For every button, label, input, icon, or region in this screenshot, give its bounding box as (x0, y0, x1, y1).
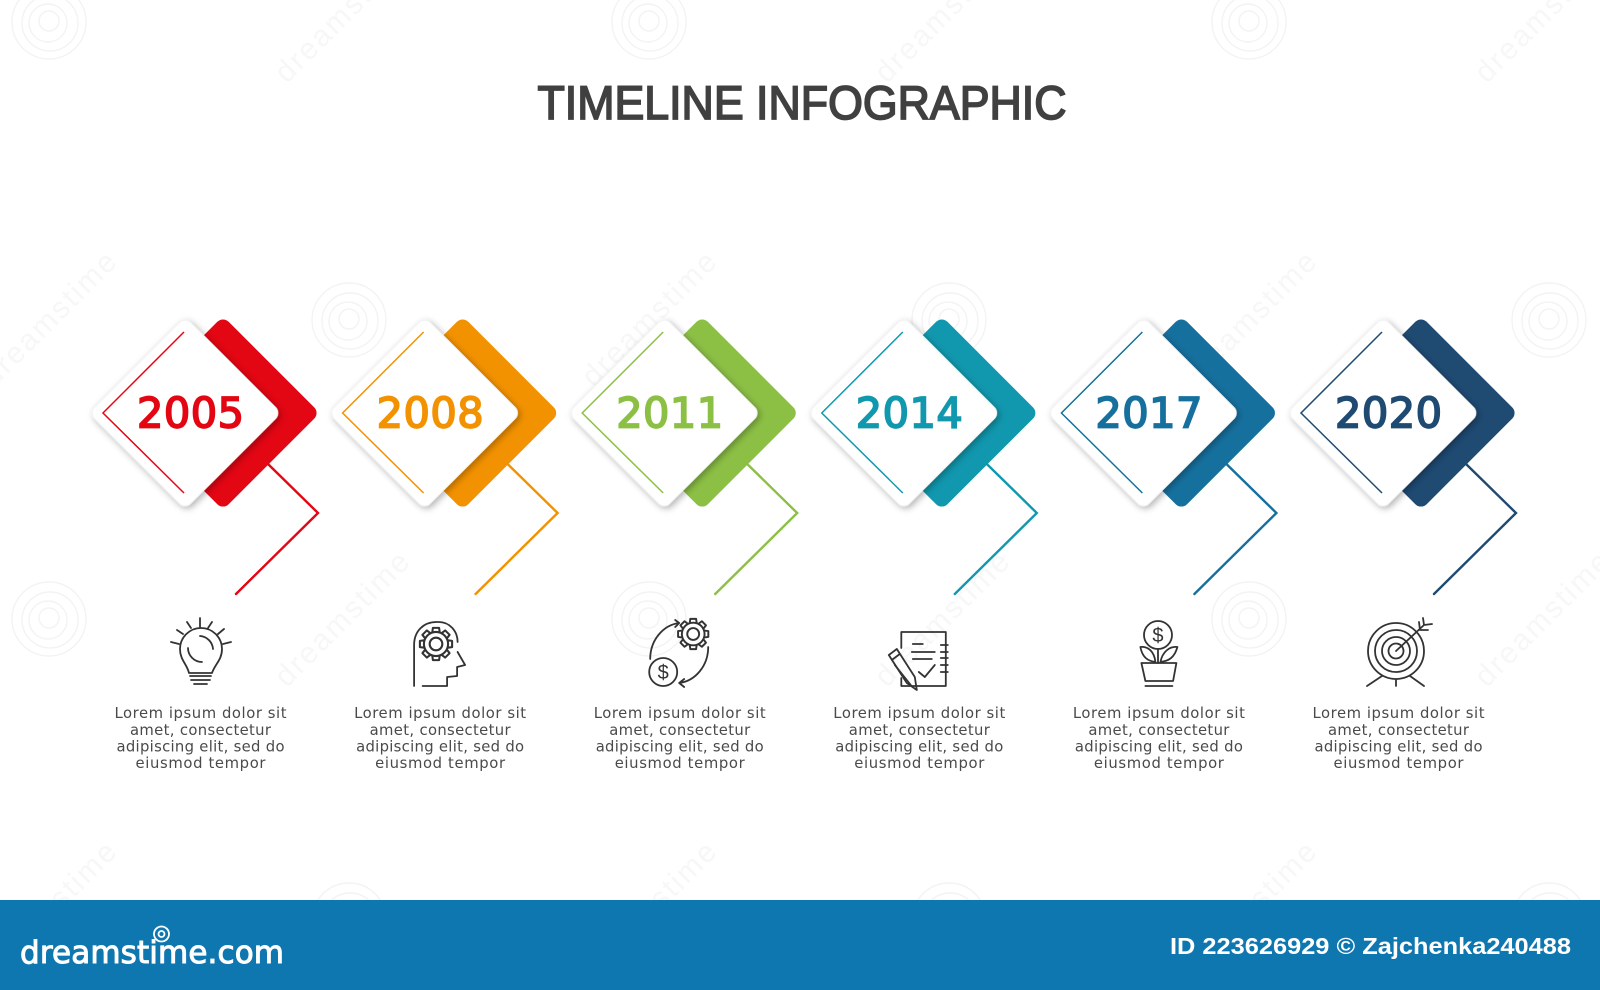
year: 2017: 2017 (1095, 388, 1202, 438)
connector line: 2020 (1434, 464, 1516, 594)
year: 2020: 2020 (1335, 388, 1442, 438)
icon: document and pen (889, 632, 948, 690)
description: 2017 (1073, 705, 1245, 772)
description: 2014 (833, 705, 1005, 772)
back chevron: 2017 (1085, 316, 1278, 510)
watermark pattern: dreamstime (1175, 835, 1323, 983)
description: 2020: amet, consectetur (1328, 722, 1470, 739)
description: 2011: Lorem ipsum dolor sit (594, 705, 766, 722)
step 2020 (1287, 316, 1518, 772)
image id and credit: ID 223626929 © Zajchenka240488 (1170, 933, 1571, 959)
white diamond: 2008 (328, 317, 521, 509)
diamond outline: 2011 (582, 332, 663, 493)
description: 2008: adipiscing elit, sed do (356, 738, 524, 756)
description: 2020: Lorem ipsum dolor sit (1312, 705, 1485, 722)
step 2008 (328, 316, 559, 772)
description: 2020: eiusmod tempor (1334, 755, 1464, 772)
step 2005 (89, 316, 320, 772)
icon: head with gear (414, 622, 465, 686)
white diamond: 2020 (1287, 317, 1479, 509)
back chevron: 2014 (845, 316, 1039, 510)
year: 2005: 2005 (137, 388, 244, 438)
description: 2014: adipiscing elit, sed do (835, 738, 1003, 756)
year: 2011: 2011 (616, 388, 723, 438)
step 2011 (568, 316, 799, 772)
description: 2008: eiusmod tempor (375, 755, 506, 772)
description: 2011: amet, consectetur (609, 722, 751, 739)
dollar sign: cycle icon: $ (658, 662, 669, 684)
watermark pattern: dreamstime (575, 245, 723, 393)
description: 2005: Lorem ipsum dolor sit (114, 705, 287, 722)
step 2014 (808, 316, 1039, 772)
year: 2008: 2008 (377, 388, 484, 438)
step 2017 (1047, 316, 1278, 772)
icon: light bulb (171, 618, 231, 684)
description: 2005: amet, consectetur (130, 722, 272, 739)
footer banner (0, 900, 1600, 990)
description: 2017: eiusmod tempor (1094, 755, 1225, 772)
description: 2008: Lorem ipsum dolor sit (354, 705, 526, 722)
description: 2011 (594, 705, 766, 772)
icon: money and gear cycle (649, 619, 708, 687)
white diamond: 2005 (89, 317, 281, 509)
diamond outline: 2020 (1301, 332, 1382, 493)
description: 2017: adipiscing elit, sed do (1075, 738, 1243, 756)
brand spiral icon (154, 926, 169, 942)
brand logo text: dreamstime.com (20, 935, 284, 971)
back chevron: 2005 (126, 316, 320, 510)
icon: money plant (1140, 621, 1177, 686)
title: TIMELINE INFOGRAPHIC (538, 76, 1066, 129)
diamond outline: 2017 (1061, 332, 1142, 493)
connector line: 2014 (955, 464, 1037, 594)
description: 2005: adipiscing elit, sed do (116, 738, 284, 756)
description: 2005: eiusmod tempor (136, 755, 266, 772)
watermark pattern: dreamstime (268, 545, 416, 693)
description: 2020: adipiscing elit, sed do (1314, 738, 1482, 756)
description: 2014: Lorem ipsum dolor sit (833, 705, 1005, 722)
description: 2017: amet, consectetur (1088, 722, 1230, 739)
description: 2011: eiusmod tempor (615, 755, 746, 772)
watermark pattern: dreamstime (1175, 245, 1323, 393)
watermark pattern: dreamstime (868, 545, 1016, 693)
connector line: 2011 (715, 464, 797, 594)
diamond outline: 2005 (103, 332, 184, 493)
connector line: 2017 (1194, 464, 1276, 594)
description: 2008 (354, 705, 526, 772)
year: 2014: 2014 (856, 388, 963, 438)
white diamond: 2017 (1047, 317, 1240, 509)
connector line: 2005 (236, 464, 318, 594)
description: 2005 (114, 705, 287, 772)
back chevron: 2011 (605, 316, 799, 510)
dollar sign: plant icon: $ (1152, 625, 1164, 647)
connector line: 2008 (476, 464, 558, 594)
diamond outline: 2014 (822, 332, 903, 493)
diamond outline: 2008 (343, 332, 424, 493)
description: 2017: Lorem ipsum dolor sit (1073, 705, 1245, 722)
back chevron: 2008 (366, 316, 559, 510)
description: 2008: amet, consectetur (370, 722, 512, 739)
description: 2014: amet, consectetur (849, 722, 991, 739)
white diamond: 2011 (568, 317, 760, 509)
description: 2011: adipiscing elit, sed do (596, 738, 764, 756)
white diamond: 2014 (808, 317, 1000, 509)
description: 2014: eiusmod tempor (854, 755, 985, 772)
watermark pattern: dreamstime (575, 835, 723, 983)
back chevron: 2020 (1324, 316, 1518, 510)
description: 2020 (1312, 705, 1485, 772)
icon: target with arrow (1367, 618, 1432, 686)
